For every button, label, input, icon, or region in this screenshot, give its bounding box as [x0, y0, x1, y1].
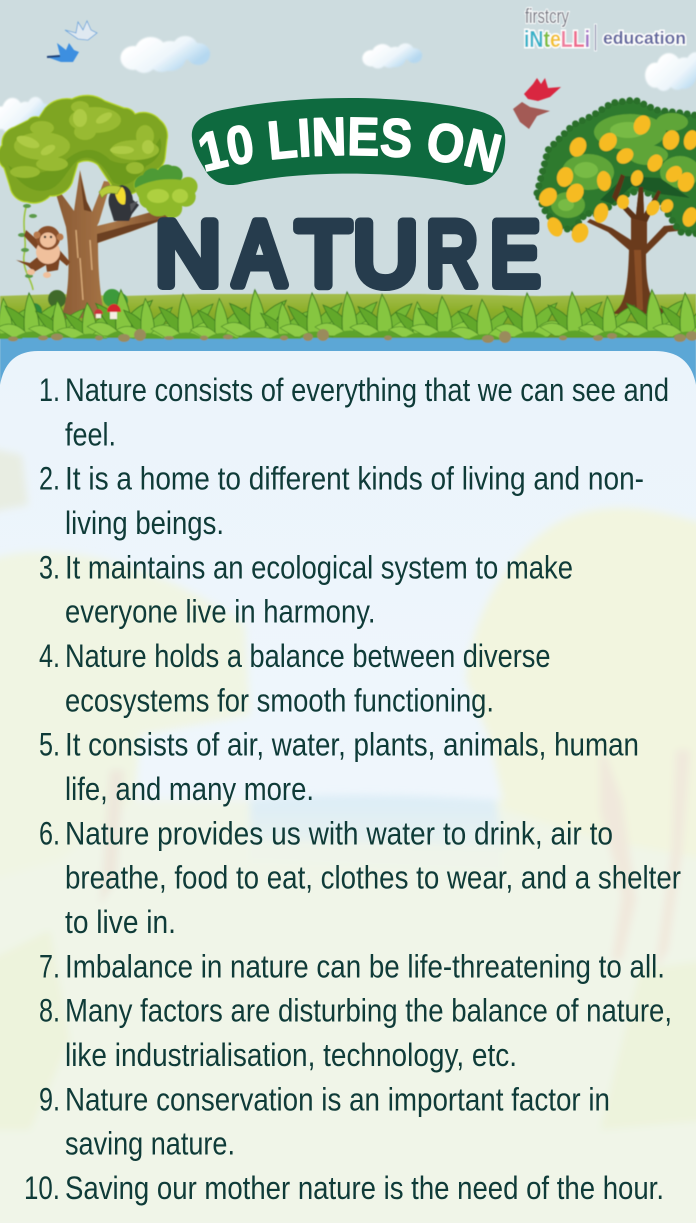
small leafy bush on branch: [134, 165, 198, 218]
item 8: like industrialisation, technology, etc.: [65, 1037, 517, 1073]
item 1: 1.: [39, 372, 60, 408]
icon: red birds: [513, 78, 561, 129]
title: NATURE: R: [426, 204, 478, 305]
item 9: 9.: [39, 1081, 60, 1117]
mango canopy highlights: [551, 113, 696, 218]
item 2: [39, 461, 644, 541]
icon: vine: [18, 204, 37, 290]
grass tufts and stones: [0, 290, 696, 343]
item 7: 7.: [39, 948, 60, 984]
icon: monkey: [16, 226, 70, 278]
title: NATURE: E: [490, 204, 540, 305]
tree canopy: [0, 95, 167, 203]
item 1: feel.: [65, 416, 116, 452]
banner shape: [192, 98, 505, 185]
logo: firstcry intelli education: education: [603, 28, 686, 48]
item 4: [39, 638, 550, 718]
item 8: [39, 993, 672, 1073]
numbered list: [24, 372, 681, 1206]
under canopy shadow: [600, 176, 690, 204]
item 5: [39, 727, 639, 807]
item 5: 5.: [39, 727, 60, 763]
item 4: 4.: [39, 638, 60, 674]
item 5: life, and many more.: [65, 771, 314, 807]
item 2: living beings.: [65, 505, 224, 541]
grass bank: [0, 294, 696, 345]
mangoes: [535, 113, 696, 245]
logo: firstcry intelli education: firstcry: [525, 6, 569, 28]
mango tree: [535, 100, 696, 314]
item 3: 3.: [39, 549, 60, 585]
logo: firstcry intelli education: iNteLLi: [524, 26, 590, 52]
banner text: 10 LINES ON: [199, 117, 502, 173]
river: [0, 338, 696, 398]
left tree with animals: [0, 95, 198, 319]
icon: blue birds: [47, 21, 97, 62]
cloud: top centre-left: [120, 36, 210, 73]
item 6: to live in.: [65, 904, 176, 940]
item 4: ecosystems for smooth functioning.: [65, 682, 494, 718]
sky background: [0, 0, 696, 345]
clouds: [0, 36, 696, 132]
bush behind trunk: [48, 290, 66, 308]
item 9: [39, 1081, 610, 1162]
item 3: everyone live in harmony.: [65, 594, 376, 630]
title: NATURE: U: [353, 204, 418, 305]
title: NATURE: T: [296, 204, 351, 305]
item 2: 2.: [39, 461, 60, 497]
item 6: Nature provides us with water to drink, air to: [65, 815, 613, 851]
mango trunk: [587, 174, 696, 314]
cloud: top centre: [362, 43, 422, 69]
panel: list background: [0, 351, 696, 1223]
item 6: 6.: [39, 815, 60, 851]
item 3: It maintains an ecological system to make: [65, 549, 573, 585]
item 10: 10.: [24, 1170, 60, 1206]
icon: red mushrooms: [94, 304, 121, 319]
item 6: [39, 815, 681, 940]
title: NATURE: N: [155, 204, 221, 305]
illustrated header scene: [0, 21, 696, 398]
icon: toucan: [99, 185, 139, 221]
item 3: [39, 549, 573, 630]
canopy highlights: [10, 101, 159, 178]
tree trunk: [56, 170, 168, 318]
cloud: top right: [645, 52, 696, 91]
title: NATURE: A: [234, 204, 285, 305]
title banner: [192, 98, 506, 185]
cloud: behind left tree: [0, 97, 52, 132]
faded forest illustration: [0, 448, 696, 1223]
mango canopy: [537, 100, 696, 234]
stones: [8, 329, 696, 343]
item 1: [39, 372, 669, 452]
item 9: Nature conservation is an important factor in: [65, 1081, 610, 1117]
item 8: 8.: [39, 993, 60, 1029]
logo: firstcry intelli education: [524, 6, 686, 52]
item 4: Nature holds a balance between diverse: [65, 638, 550, 674]
item 9: saving nature.: [65, 1126, 235, 1162]
